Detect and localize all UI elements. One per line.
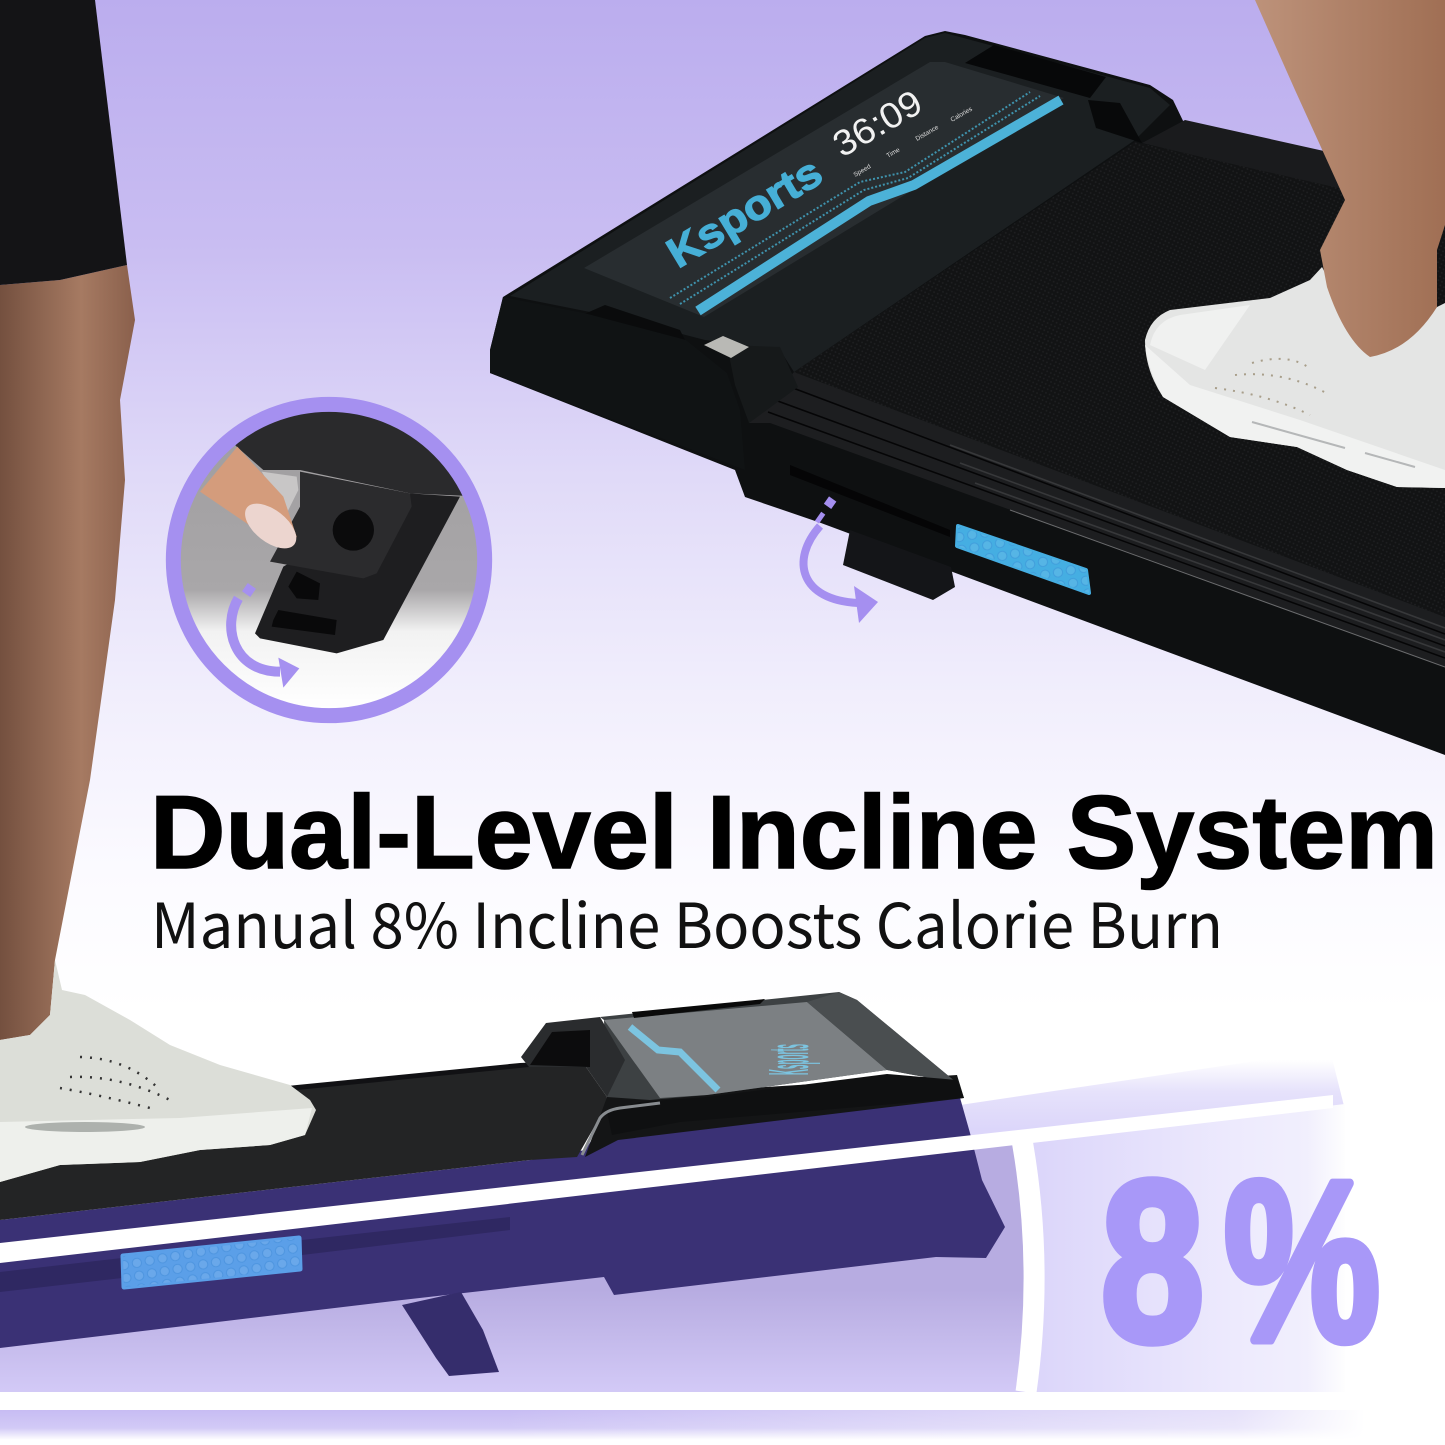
big 8%: % — [1224, 1135, 1380, 1389]
console corner highlight — [582, 1103, 660, 1155]
white base line — [0, 1392, 1362, 1410]
black shorts — [0, 0, 127, 285]
top right surface — [807, 992, 957, 1083]
white curved divider — [1022, 1140, 1034, 1392]
bottom shoe — [0, 960, 316, 1182]
display labels: Distance — [914, 124, 940, 143]
display labels: Time — [886, 146, 902, 160]
sole slots — [1252, 422, 1415, 467]
blue side pad — [123, 1238, 300, 1287]
light corner — [262, 472, 298, 513]
display labels: Calories — [950, 105, 974, 124]
top black edge — [0, 1060, 586, 1130]
pad texture — [123, 1238, 300, 1287]
console front face — [490, 297, 745, 470]
thin stripes — [670, 92, 1040, 304]
console corner bracket — [727, 345, 798, 423]
QR code — [704, 336, 749, 358]
console top face — [604, 1002, 887, 1098]
treadmill frame — [490, 31, 1445, 755]
rail highlight — [1010, 510, 1445, 667]
console top surface — [510, 33, 1170, 372]
display labels: Speed — [852, 163, 873, 179]
screw — [333, 509, 374, 551]
frame slot — [790, 465, 950, 537]
big 8% — [1101, 1135, 1380, 1389]
timer: 36:09 — [826, 81, 929, 165]
rail ribs — [950, 445, 1445, 652]
back rail — [1142, 120, 1445, 215]
brand: Ksports — [658, 148, 830, 277]
dark deck — [235, 412, 462, 496]
white shoe — [1145, 267, 1445, 488]
finger — [200, 447, 297, 547]
sole shadow — [25, 1122, 145, 1132]
shoe toe highlight — [1150, 305, 1250, 370]
holes — [288, 572, 320, 600]
lower body — [0, 1080, 1005, 1348]
shoe sole — [0, 1108, 312, 1182]
incline foot — [402, 1292, 499, 1376]
post inner — [530, 1030, 590, 1067]
plate — [270, 472, 412, 578]
lens fill — [180, 411, 478, 709]
console display panel — [584, 62, 1064, 317]
side rail — [749, 372, 1445, 667]
pad texture — [957, 526, 1089, 593]
console base — [585, 1075, 964, 1157]
post — [521, 1017, 625, 1097]
blue side pad — [957, 526, 1089, 593]
incline foot — [843, 530, 955, 600]
shoe mesh — [1215, 359, 1330, 415]
purple incline wedge — [0, 1050, 1445, 1445]
leg — [1255, 0, 1445, 357]
blue stripe — [698, 100, 1061, 311]
blue stripe — [630, 1027, 718, 1090]
front black band — [607, 1074, 964, 1135]
inset arrow — [231, 583, 299, 688]
big 8%: 8 — [1101, 1135, 1204, 1389]
foot block — [255, 493, 460, 653]
inset circle: incline foot close-up — [173, 390, 485, 716]
title: Dual-Level Incline System — [150, 775, 1438, 891]
shoe sole — [1145, 345, 1445, 488]
rotation arrow — [804, 496, 878, 623]
handle slot near — [582, 305, 686, 342]
handle slot — [632, 999, 765, 1018]
top leg and shoe — [1145, 0, 1445, 488]
calf — [0, 265, 135, 1040]
display labels — [852, 105, 974, 179]
belt — [0, 1067, 607, 1220]
dark groove — [0, 1258, 122, 1292]
shoe mesh — [60, 1057, 170, 1108]
running belt — [794, 142, 1445, 617]
console shell — [600, 992, 957, 1100]
dark groove right — [302, 1217, 510, 1255]
handle slot far — [965, 45, 1106, 98]
bottom treadmill — [0, 992, 1005, 1376]
top treadmill — [490, 31, 1445, 755]
bottom treadmill: Ksports — [758, 1044, 821, 1075]
nail — [245, 504, 296, 548]
subtitle: Manual 8% Incline Boosts Calorie Burn — [151, 876, 1223, 966]
left leg — [0, 0, 135, 1040]
white rising line — [0, 1095, 1333, 1263]
ring — [173, 404, 485, 716]
grip post — [1088, 100, 1142, 143]
